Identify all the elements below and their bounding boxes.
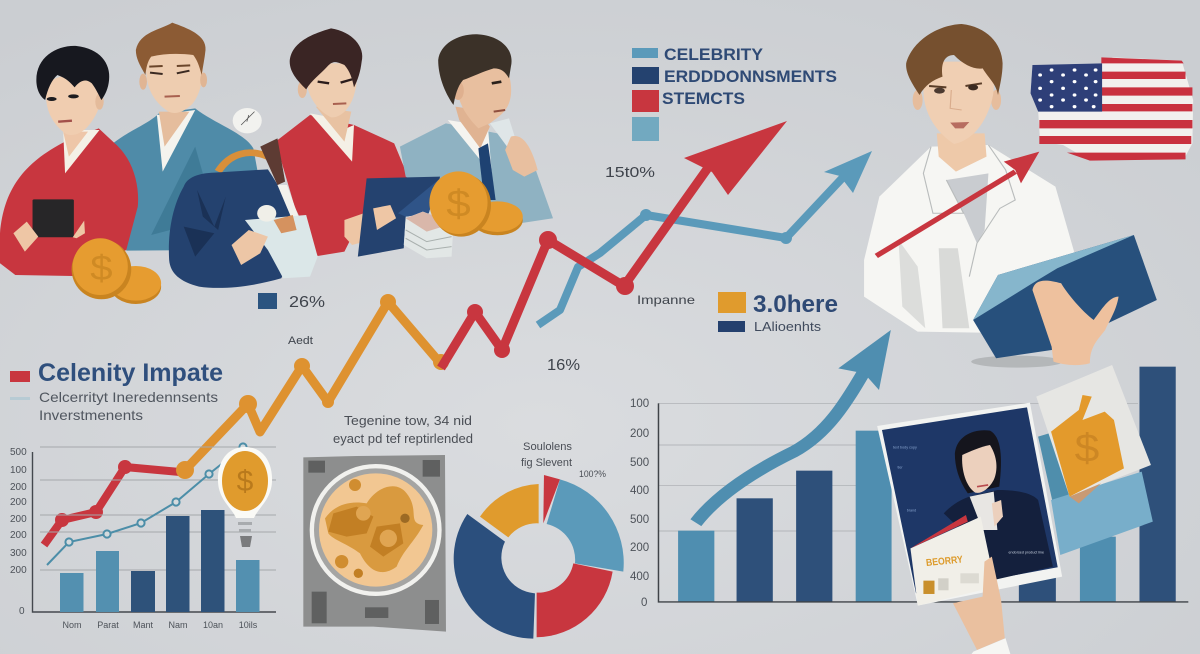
poster body text: brand <box>907 509 916 513</box>
right chart y-axis labels: 400 <box>630 485 649 497</box>
navy bag with orange handle <box>169 138 318 288</box>
person 4: light blue suit <box>400 34 553 227</box>
gold coins bottom left: $ <box>90 248 113 287</box>
callout: 16%: 16% <box>547 357 580 374</box>
left chart y-axis labels: 100 <box>10 465 27 476</box>
right chart y-axis labels: 200 <box>630 428 649 440</box>
blue trend arrow upper <box>538 151 872 325</box>
white lab coat <box>864 145 1075 333</box>
left chart y-axis labels: 200 <box>10 514 27 525</box>
left chart y-axis labels <box>10 447 27 617</box>
right chart y-axis labels: 400 <box>630 571 649 583</box>
right bar chart <box>630 330 1188 654</box>
text: donut caption: 100?% <box>579 469 606 479</box>
text: food caption <box>333 413 473 446</box>
section heading: Celenity Impate <box>10 359 223 400</box>
poster brand name: BEORRY <box>925 554 963 569</box>
left chart y-axis labels: 200 <box>10 482 27 493</box>
poster body text: endorsed product line <box>1009 550 1044 554</box>
section sub-text <box>39 389 218 423</box>
callout: 26% with swatch <box>258 293 325 311</box>
group of four celebrities with coins and bag <box>0 23 553 304</box>
gold coins top right: $ <box>446 182 471 225</box>
person 1: red hanbok <box>0 46 138 276</box>
callout: Aedt: Aedt <box>288 335 313 347</box>
left chart y-axis labels: 200 <box>10 530 27 541</box>
multi-colour rising line chart <box>44 121 787 545</box>
red arrow across coat <box>876 152 1039 256</box>
right chart axes <box>658 403 1188 602</box>
right chart y-axis labels: 500 <box>630 514 649 526</box>
text: donut caption: Soulolens <box>523 441 572 453</box>
section heading: Celenity Impate: Celenity Impate <box>38 359 223 387</box>
red line segment with arrow <box>441 121 787 368</box>
left chart x-axis labels: Nom <box>62 620 82 630</box>
legend: celebrity endorsements: CELEBRITY <box>664 45 764 64</box>
text: food caption: eyact pd tef reptirlended <box>333 431 473 446</box>
left chart y-axis labels: 200 <box>10 497 27 508</box>
navy folder held in hand <box>971 235 1157 368</box>
legend: celebrity endorsements <box>632 45 837 141</box>
hand holding poster <box>953 557 1010 654</box>
left chart y-axis labels: 200 <box>10 565 27 576</box>
donut slice: light blue <box>547 479 624 572</box>
left chart y-axis labels: 300 <box>10 548 27 559</box>
donut slice: small red <box>543 475 560 523</box>
poster body text <box>893 445 1044 554</box>
rising blue curve arrow <box>696 330 891 523</box>
donut slice: lower red <box>537 563 613 637</box>
dollar note and sleeve: $ <box>1075 426 1099 470</box>
legend: celebrity endorsements: ERDDDONNSMENTS <box>664 67 837 86</box>
callout: 15t0%: 15t0% <box>605 164 655 181</box>
gold coins bottom left <box>72 238 161 304</box>
left chart x-axis labels <box>62 620 258 630</box>
gold coins top right <box>429 171 523 237</box>
right chart y-axis labels: 0 <box>641 597 647 609</box>
legend: celebrity endorsements: STEMCTS <box>662 89 745 108</box>
person 3: red hanbok <box>276 28 409 256</box>
right chart y-axis labels: 100 <box>630 398 649 410</box>
donut chart <box>454 475 624 639</box>
section sub-text: Inverstmenents <box>39 407 143 423</box>
left chart bars <box>60 510 260 612</box>
dollar note and sleeve <box>1036 365 1153 555</box>
icon: light bulb with dollar coin <box>218 447 272 547</box>
head and hair <box>906 24 1003 172</box>
orange line segment <box>176 294 449 479</box>
left chart x-axis labels: Mant <box>133 620 154 630</box>
left combo chart <box>10 443 276 630</box>
left chart x-axis labels: 10ils <box>239 620 258 630</box>
left chart x-axis labels: Parat <box>97 620 119 630</box>
text: donut caption <box>521 441 606 479</box>
left chart x-axis labels: Nam <box>168 620 188 630</box>
donut slice: orange <box>480 484 539 537</box>
callout: 3.0here with swatches <box>718 291 838 334</box>
left chart gridlines and axes <box>32 447 276 612</box>
placemat icons <box>308 460 440 624</box>
donut slice: navy <box>454 514 535 639</box>
person 2: teal hanbok <box>113 23 264 251</box>
person with lab coat, flag and folder <box>864 24 1193 368</box>
callout: 26% with swatch: 26% <box>289 294 325 311</box>
right chart y-axis labels: 500 <box>630 457 649 469</box>
left chart y-axis labels: 0 <box>19 606 25 617</box>
section sub-text: Celcerrityt Ineredennsents <box>39 389 218 405</box>
left chart thin blue line <box>47 443 247 565</box>
poster body text: text body copy <box>893 445 917 449</box>
right chart y-axis labels: 200 <box>630 542 649 554</box>
icon: light bulb with dollar coin: $ <box>237 465 254 498</box>
left chart x-axis labels: 10an <box>203 620 223 630</box>
stack of banknotes <box>404 212 453 258</box>
grey placemat <box>303 455 446 632</box>
callout: 3.0here with swatches: LAlioenhts <box>754 319 822 334</box>
poster body text: tier <box>898 465 904 469</box>
poster with woman <box>877 403 1062 606</box>
callout: 3.0here with swatches: 3.0here <box>753 291 838 318</box>
left chart y-axis labels: 500 <box>10 447 27 458</box>
plate with food <box>310 464 442 596</box>
red line segment, left <box>44 460 180 545</box>
callout: Impanne: Impanne <box>637 293 695 307</box>
right chart gridlines <box>658 403 1138 531</box>
text: food caption: Tegenine tow, 34 nid <box>344 413 472 428</box>
right chart bars <box>678 367 1176 602</box>
speech bubble icon <box>233 108 262 133</box>
American flag <box>1031 57 1193 161</box>
folder held by person 3 <box>358 177 440 257</box>
food plate illustration <box>303 455 446 632</box>
text: donut caption: fig Slevent <box>521 457 572 469</box>
right chart y-axis labels <box>630 398 649 609</box>
